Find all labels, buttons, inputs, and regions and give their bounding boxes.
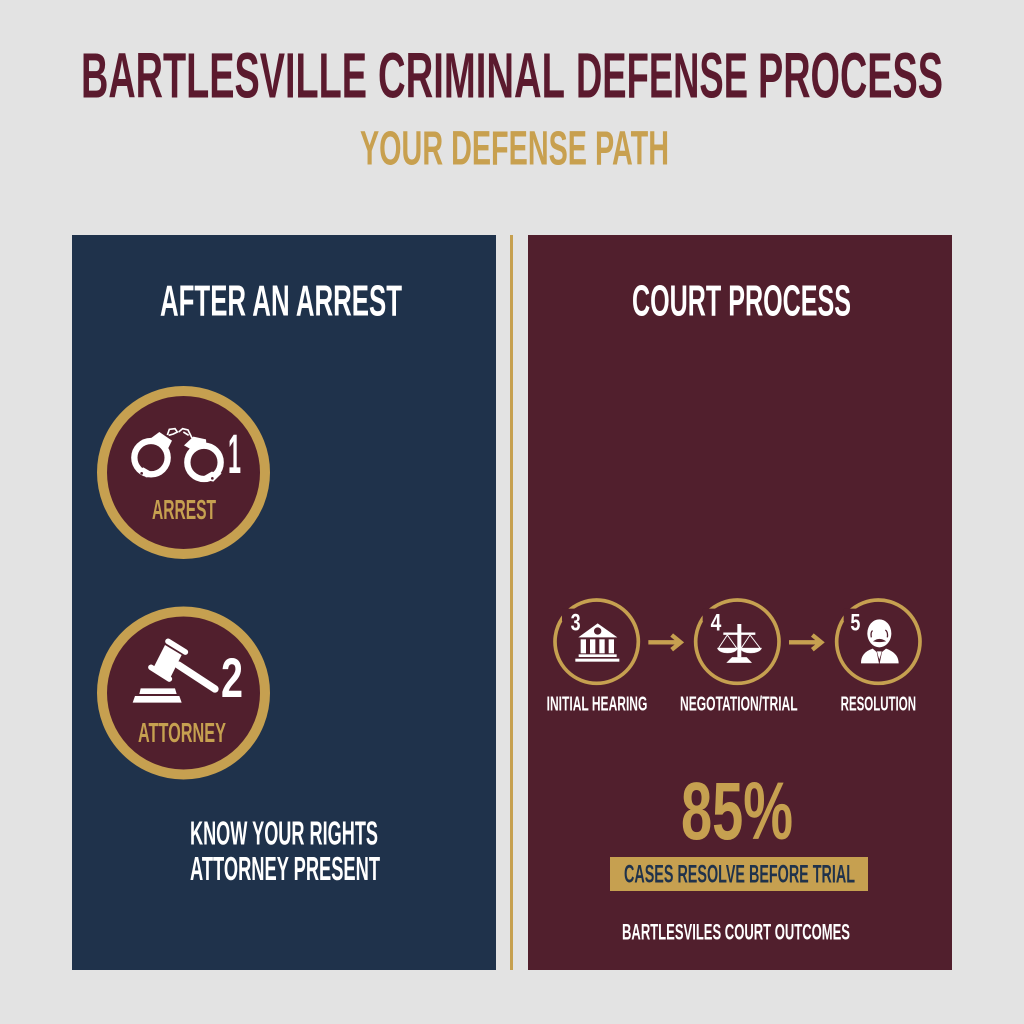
step 4: negotiation or trial bbox=[680, 600, 798, 716]
step 3: initial hearing bbox=[547, 600, 647, 716]
number 4: 4 bbox=[711, 610, 722, 637]
step 1: arrest badge bbox=[102, 391, 265, 554]
label: resolution: RESOLUTION bbox=[841, 693, 916, 716]
title: BARTLESVILLE bbox=[81, 40, 367, 112]
icon: person bbox=[861, 619, 899, 663]
title bbox=[81, 40, 943, 112]
arrow: step 4 to step 5 bbox=[789, 635, 821, 650]
heading: after an arrest: AFTER AN ARREST bbox=[160, 276, 402, 326]
heading: court process: COURT PROCESS bbox=[632, 276, 851, 326]
icon: scales of justice bbox=[717, 624, 762, 663]
title: CRIMINAL bbox=[378, 40, 565, 112]
stat: 85 percent: 85% bbox=[681, 766, 793, 857]
label: negotation/trial: NEGOTATION/TRIAL bbox=[680, 693, 798, 716]
label: initial hearing: INITIAL HEARING bbox=[547, 693, 647, 716]
step 1: arrest badge: 1 bbox=[228, 422, 241, 485]
label: arrest: ARREST bbox=[152, 494, 216, 525]
text block: know your rights: KNOW YOUR RIGHTS bbox=[190, 814, 378, 852]
label: attorney: ATTORNEY bbox=[138, 717, 226, 748]
step 5: resolution bbox=[837, 600, 920, 716]
panel: after an arrest bbox=[72, 235, 496, 970]
banner: cases resolve before trial: CASES RESOLVE BEFORE TRIAL bbox=[624, 860, 855, 888]
step 2: attorney badge bbox=[102, 612, 265, 774]
arrow: step 3 to step 4 bbox=[648, 635, 681, 650]
icon: courthouse bbox=[575, 623, 619, 662]
number 5: 5 bbox=[850, 610, 860, 637]
text block: know your rights bbox=[190, 814, 380, 887]
icon: gavel bbox=[133, 641, 215, 703]
icon: handcuffs bbox=[134, 429, 222, 482]
banner: cases resolve before trial bbox=[610, 857, 868, 891]
subtitle: YOUR DEFENSE PATH bbox=[360, 122, 669, 176]
number 3: 3 bbox=[571, 610, 581, 637]
text block: know your rights: ATTORNEY PRESENT bbox=[190, 850, 380, 887]
title: DEFENSE bbox=[576, 40, 748, 112]
caption: court outcomes: BARTLESVILES COURT OUTCOMES bbox=[622, 920, 850, 944]
panel: court process bbox=[528, 235, 952, 970]
number 2: 2 bbox=[221, 646, 243, 709]
process flow bbox=[547, 600, 920, 716]
